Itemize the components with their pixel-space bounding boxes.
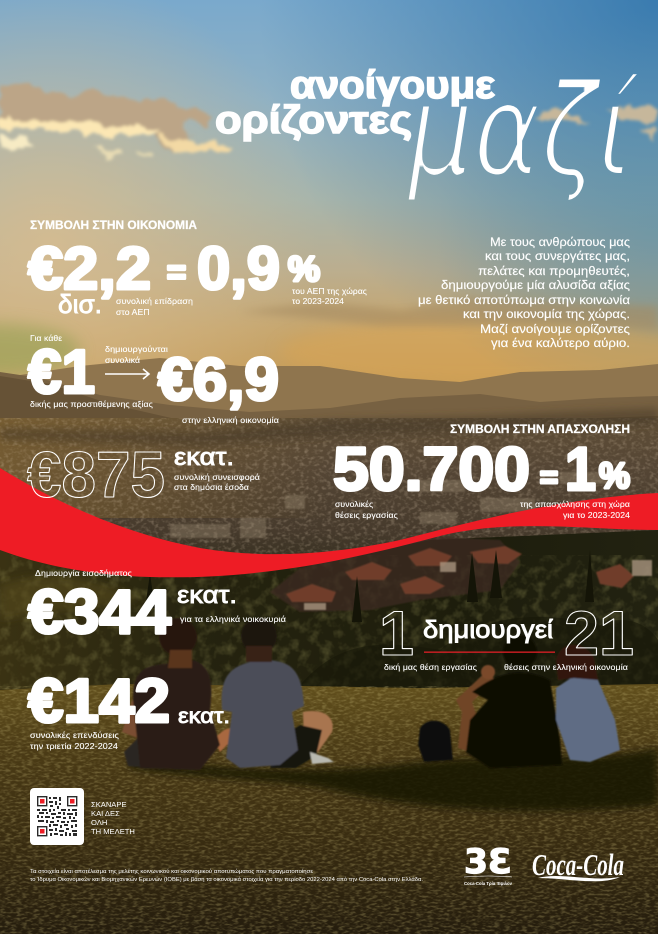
text block: intro statement: και τους συνεργάτες μας, bbox=[485, 249, 630, 263]
red underline bbox=[424, 652, 555, 653]
caption: jobs in the economy: θέσεις στην ελληνική οικονομία bbox=[504, 662, 628, 672]
text block: intro statement: πελάτες και προμηθευτές, bbox=[478, 264, 630, 278]
stat: 2.2 billion euros: €2,2 bbox=[28, 235, 151, 302]
QR caption: ΟΛΗ bbox=[91, 818, 107, 827]
caption: investments: συνολικές επενδύσεις bbox=[30, 730, 119, 740]
percent sign: % bbox=[288, 250, 320, 289]
caption: Greek economy: στην ελληνική οικονομία bbox=[182, 415, 279, 425]
text block: intro statement: και την οικονομία της χώρας. bbox=[463, 307, 630, 321]
tree ridge and hillside bbox=[0, 530, 658, 700]
equals sign: = bbox=[167, 254, 186, 290]
stat: 1 outlined: 1 bbox=[379, 599, 414, 669]
panel: contribution to employment bbox=[333, 422, 630, 520]
mountains bbox=[0, 358, 658, 440]
people sitting on the right: friends and backpack bbox=[418, 635, 620, 768]
unit: million: εκατ. bbox=[174, 444, 234, 471]
logo: Coca-Cola Tria Epsilon: 3Ɛ bbox=[464, 842, 512, 882]
footnote bbox=[30, 868, 423, 883]
panel: job multiplier bbox=[379, 599, 634, 672]
stat: 6.9 euros: €6,9 bbox=[158, 346, 279, 413]
percent sign: % bbox=[599, 455, 630, 496]
arrow bbox=[105, 369, 149, 379]
QR code card bbox=[30, 788, 84, 845]
QR caption: ΚΑΙ ΔΕΣ bbox=[91, 809, 120, 818]
red wave bbox=[0, 468, 658, 577]
QR caption: ΤΗ ΜΕΛΕΤΗ bbox=[91, 827, 135, 836]
stat: 1 euro: €1 bbox=[28, 338, 95, 407]
text block: intro statement: Μαζί ανοίγουμε ορίζοντες bbox=[480, 322, 630, 336]
panel: contribution to the economy bbox=[27, 218, 367, 511]
stat: 50,700 jobs: 50.700 bbox=[333, 435, 530, 503]
stat: 142 million: €142 bbox=[28, 667, 170, 736]
caption: public revenue line two: στα δημόσια έσοδα bbox=[174, 482, 249, 492]
panel: income generation bbox=[28, 568, 286, 751]
equals sign: = bbox=[540, 461, 558, 494]
stat: 21 outlined: 21 bbox=[564, 599, 634, 669]
caption: total GDP impact: συνολική επίδραση bbox=[116, 296, 193, 306]
footnote: το Ίδρυμα Οικονομικών και Βιομηχανικών Ερευνών (ΙΟΒΕ) με βάση τα οικονομικά στοιχεία για την περίοδο 2022-2024 από την Coca-Cola στην Ελλάδα. bbox=[30, 876, 423, 883]
caption: total: συνολικές bbox=[335, 499, 373, 509]
caption: jobs: θέσεις εργασίας bbox=[335, 510, 398, 520]
text block: intro statement: Με τους ανθρώπους μας bbox=[490, 235, 630, 249]
caption: own job: δική μας θέση εργασίας bbox=[384, 662, 477, 672]
unit: million: εκατ. bbox=[177, 582, 237, 609]
caption: period: για το 2023-2024 bbox=[563, 510, 630, 520]
caption: period: το 2023-2024 bbox=[292, 296, 344, 306]
heading: employment: ΣΥΜΒΟΛΗ ΣΤΗΝ ΑΠΑΣΧΟΛΗΣΗ bbox=[450, 422, 630, 436]
grass bbox=[0, 684, 658, 934]
text block: intro statement: με θετικό αποτύπωμα στην κοινωνία bbox=[418, 293, 630, 307]
QR caption bbox=[91, 800, 135, 836]
caption: own value added: δικής μας προστιθέμενης αξίας bbox=[30, 399, 153, 409]
title bbox=[215, 57, 642, 206]
unit: billion: δισ. bbox=[58, 289, 102, 319]
footnote: Τα στοιχεία είναι αποτέλεσμα της μελέτης κοινωνικού και οικονομικού αποτυπώματος που πραγματοποίησε bbox=[30, 868, 314, 875]
caption: public revenue: συνολική συνεισφορά bbox=[174, 472, 260, 482]
city bbox=[0, 418, 658, 580]
people sitting on the left: two friends seen from behind bbox=[122, 618, 334, 770]
caption: in total: συνολικά bbox=[105, 355, 140, 365]
text block: intro statement: δημιουργούμε μία αλυσίδα αξίας bbox=[441, 278, 630, 292]
caption: period: την τριετία 2022-2024 bbox=[30, 741, 118, 751]
word: creates: δημιουργεί bbox=[423, 616, 553, 644]
QR caption: ΣΚΑΝΑΡΕ bbox=[91, 800, 127, 809]
title line: ορίζοντες: ορίζοντες bbox=[215, 99, 412, 142]
heading: economy: ΣΥΜΒΟΛΗ ΣΤΗΝ ΟΙΚΟΝΟΜΙΑ bbox=[30, 218, 197, 232]
text block: intro statement bbox=[418, 235, 630, 350]
title line: ανοίγουμε: ανοίγουμε bbox=[290, 64, 495, 107]
stat: 875 million outlined: €875 bbox=[27, 438, 165, 511]
caption: income generation: Δημιουργία εισοδήματος bbox=[35, 568, 132, 578]
caption: GDP line two: στο ΑΕΠ bbox=[116, 307, 150, 317]
caption: are created: δημιουργούνται bbox=[105, 344, 168, 354]
caption: share of employment: της απασχόλησης στη χώρα bbox=[520, 499, 630, 509]
stat: 344 million: €344 bbox=[28, 578, 172, 647]
text block: intro statement: για ένα καλύτερο αύριο. bbox=[491, 336, 630, 350]
logo: Coca-Cola Tria Epsilon: Coca-Cola Τρία Έψιλον bbox=[464, 881, 512, 887]
caption: households: για τα ελληνικά νοικοκυριά bbox=[180, 614, 286, 624]
caption: of GDP: του ΑΕΠ της χώρας bbox=[292, 286, 367, 296]
caption: for every: Για κάθε bbox=[30, 333, 62, 343]
stat: 1: 1 bbox=[565, 435, 596, 503]
unit: million: εκατ. bbox=[178, 705, 230, 728]
stat: 0.9: 0,9 bbox=[197, 235, 280, 302]
